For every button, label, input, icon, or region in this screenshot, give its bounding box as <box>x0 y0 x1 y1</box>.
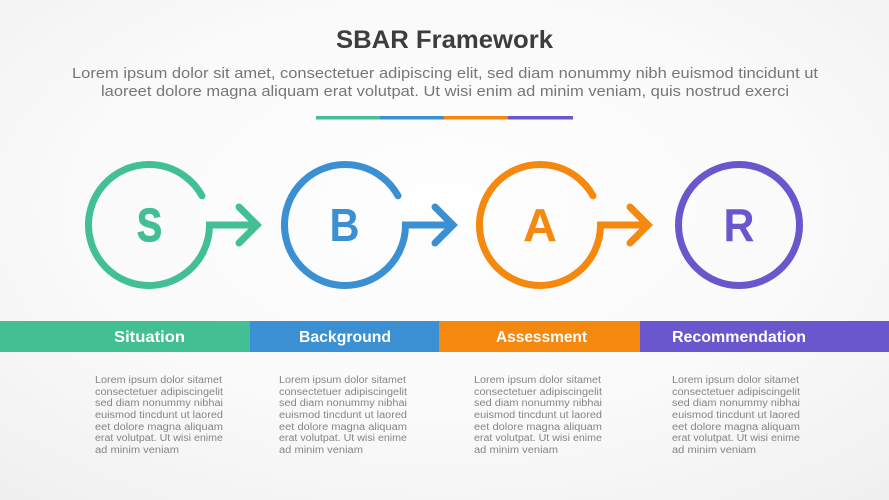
text block: Situation: sed diam nonummy nibhai <box>95 398 223 409</box>
text block: Situation: Lorem ipsum dolor sitamet <box>95 375 222 386</box>
subtitle text <box>72 65 819 100</box>
step S: circle with arrow: S <box>137 199 162 251</box>
label band: Assessment <box>439 321 640 352</box>
text block: Situation: euismod tincdunt ut laored <box>95 410 223 421</box>
text block: Background: consectetuer adipiscingelit <box>279 387 407 398</box>
subtitle text: laoreet dolore magna aliquam erat volutpat. Ut wisi enim ad minim veniam, quis nostrud exerci <box>101 83 789 100</box>
step B: circle with arrow: B <box>330 199 360 251</box>
step R: circle: R <box>724 199 754 251</box>
step S: circle with arrow <box>88 164 257 285</box>
text block: Background: ad minim veniam <box>279 445 363 456</box>
text block: Recommendation: Lorem ipsum dolor sitamet <box>672 375 799 386</box>
label band: Assessment: Assessment <box>496 329 588 346</box>
text block: Assessment: Lorem ipsum dolor sitamet <box>474 375 601 386</box>
text block: Recommendation: consectetuer adipiscingelit <box>672 387 800 398</box>
text block: Assessment: ad minim veniam <box>474 445 558 456</box>
text block: Assessment: consectetuer adipiscingelit <box>474 387 602 398</box>
text block: Background: Lorem ipsum dolor sitamet <box>279 375 406 386</box>
text block: Assessment: erat volutpat. Ut wisi enime <box>474 433 602 444</box>
text block: Situation: ad minim veniam <box>95 445 179 456</box>
text block: Situation: consectetuer adipiscingelit <box>95 387 223 398</box>
step B: circle with arrow <box>284 164 453 285</box>
text block: Situation <box>95 375 223 456</box>
text block: Recommendation: ad minim veniam <box>672 445 756 456</box>
text block: Background: erat volutpat. Ut wisi enime <box>279 433 407 444</box>
text block: Assessment: sed diam nonummy nibhai <box>474 398 602 409</box>
text block: Assessment: eet dolore magna aliquam <box>474 422 602 433</box>
text block: Recommendation: euismod tincdunt ut laored <box>672 410 800 421</box>
text block: Situation: erat volutpat. Ut wisi enime <box>95 433 223 444</box>
text block: Recommendation <box>672 375 800 456</box>
text block: Recommendation: eet dolore magna aliquam <box>672 422 800 433</box>
text block: Assessment: euismod tincdunt ut laored <box>474 410 602 421</box>
text block: Background: euismod tincdunt ut laored <box>279 410 407 421</box>
title: SBAR Framework <box>336 26 553 54</box>
title divider <box>316 116 573 120</box>
label band: Situation: Situation <box>114 329 185 346</box>
label band: Situation <box>0 321 250 352</box>
label band: Recommendation: Recommendation <box>672 329 806 346</box>
step A: circle with arrow: A <box>523 199 557 251</box>
text block: Background: sed diam nonummy nibhai <box>279 398 407 409</box>
text block: Situation: eet dolore magna aliquam <box>95 422 223 433</box>
text block: Recommendation: sed diam nonummy nibhai <box>672 398 800 409</box>
label band: Background: Background <box>299 329 391 346</box>
text block: Recommendation: erat volutpat. Ut wisi enime <box>672 433 800 444</box>
text block: Background <box>279 375 407 456</box>
label band: Recommendation <box>640 321 889 352</box>
step A: circle with arrow <box>479 164 648 285</box>
label band: Background <box>250 321 439 352</box>
text block: Background: eet dolore magna aliquam <box>279 422 407 433</box>
step R: circle <box>678 164 800 286</box>
text block: Assessment <box>474 375 602 456</box>
subtitle text: Lorem ipsum dolor sit amet, consectetuer adipiscing elit, sed diam nonummy nibh euismod tincidunt ut <box>72 65 819 82</box>
